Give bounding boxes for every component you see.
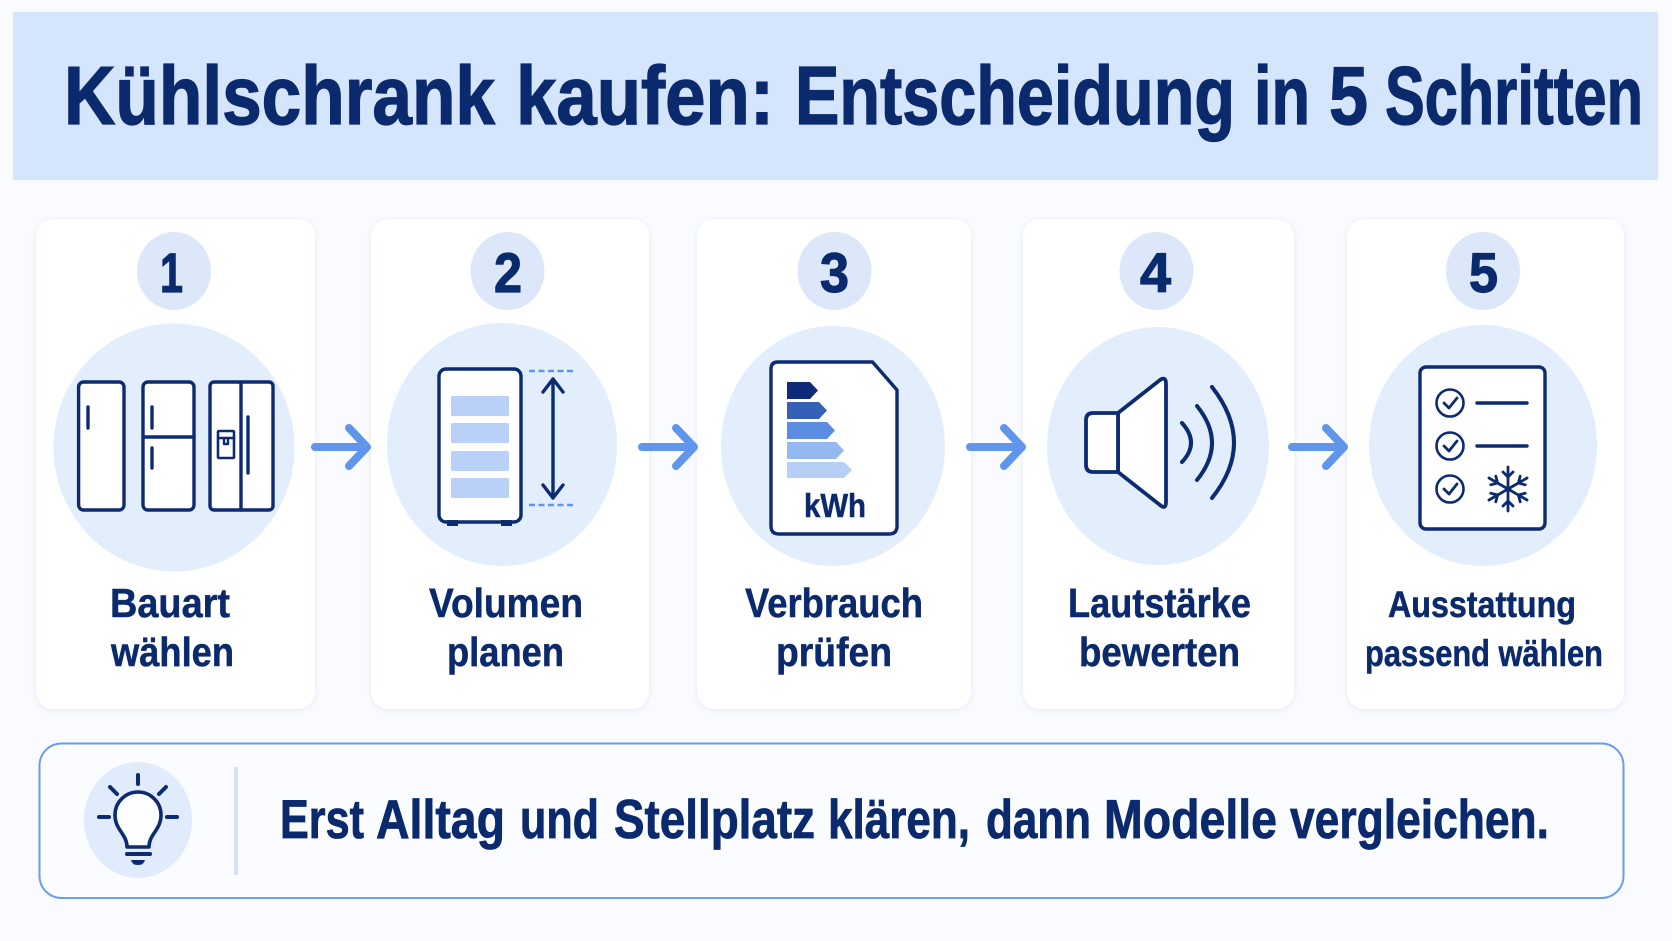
label: Verbrauch prüfen: Verbrauch: [745, 580, 923, 626]
label: Verbrauch prüfen: [745, 580, 923, 675]
badge: number 1: 1: [160, 241, 183, 304]
label: Bauart wählen: wählen: [110, 629, 234, 675]
title: 5: [1329, 49, 1368, 142]
badge: number 5: 5: [1469, 241, 1498, 304]
title: [64, 49, 1643, 142]
icon: light bulb: [84, 762, 192, 878]
panel: step 5 Ausstattung passend wählen: [1347, 219, 1624, 709]
icon: checklist with snowflake: [1369, 325, 1597, 566]
icon: speaker with sound waves: [1047, 327, 1269, 565]
title: Entscheidung: [795, 49, 1235, 142]
title: Kühlschrank: [64, 49, 496, 142]
label: Volumen planen: planen: [447, 629, 564, 675]
tip text: Alltag: [376, 788, 505, 850]
arrow: step 3 to 4: [970, 428, 1022, 466]
badge: number 2: [470, 232, 544, 310]
panel: step 2 Volumen planen: [371, 219, 649, 709]
title: in: [1254, 49, 1310, 142]
panel: step 3 Verbrauch prüfen: [697, 219, 971, 709]
badge: number 5: [1446, 232, 1520, 310]
icon: energy label kWh: [721, 326, 945, 566]
title: kaufen:: [516, 49, 774, 142]
badge: number 1: [137, 232, 211, 310]
label: Lautstärke bewerten: Lautstärke: [1068, 580, 1251, 626]
tip text: Modelle: [1104, 788, 1277, 850]
icon: three fridge types: [54, 324, 294, 572]
label: Ausstattung passend wählen: [1365, 584, 1603, 674]
icon: fridge volume with height arrow: [387, 323, 617, 566]
label: Bauart wählen: Bauart: [110, 580, 230, 626]
tip text: Stellplatz: [614, 788, 815, 850]
icon: energy label kWh: kWh: [804, 487, 866, 524]
badge: number 4: [1120, 232, 1194, 310]
tip text: dann: [986, 788, 1091, 850]
arrow: step 2 to 3: [642, 428, 694, 466]
label: Volumen planen: Volumen: [429, 580, 583, 626]
arrow: step 4 to 5: [1292, 428, 1344, 466]
label: Ausstattung passend wählen: passend wählen: [1365, 633, 1603, 674]
tip text: [280, 788, 1549, 850]
label: Lautstärke bewerten: [1068, 580, 1251, 675]
badge: number 4: 4: [1140, 241, 1171, 304]
badge: number 2: 2: [494, 241, 522, 304]
panel: step 4 Lautstärke bewerten: [1023, 219, 1294, 709]
tip text: Erst: [280, 788, 364, 850]
label: Verbrauch prüfen: prüfen: [776, 629, 892, 675]
tip text: und: [520, 788, 599, 850]
arrow: step 1 to 2: [315, 428, 367, 466]
label: Ausstattung passend wählen: Ausstattung: [1388, 584, 1576, 625]
badge: number 3: [798, 232, 872, 310]
label: Bauart wählen: [110, 580, 234, 675]
label: Lautstärke bewerten: bewerten: [1079, 629, 1240, 675]
tip text: vergleichen.: [1290, 788, 1549, 850]
badge: number 3: 3: [820, 241, 849, 304]
label: Volumen planen: [429, 580, 583, 675]
tip text: klären,: [828, 788, 970, 850]
header banner: [13, 12, 1658, 180]
panel: step 1 Bauart wählen: [36, 219, 315, 709]
callout: tip bar: [40, 744, 1624, 898]
